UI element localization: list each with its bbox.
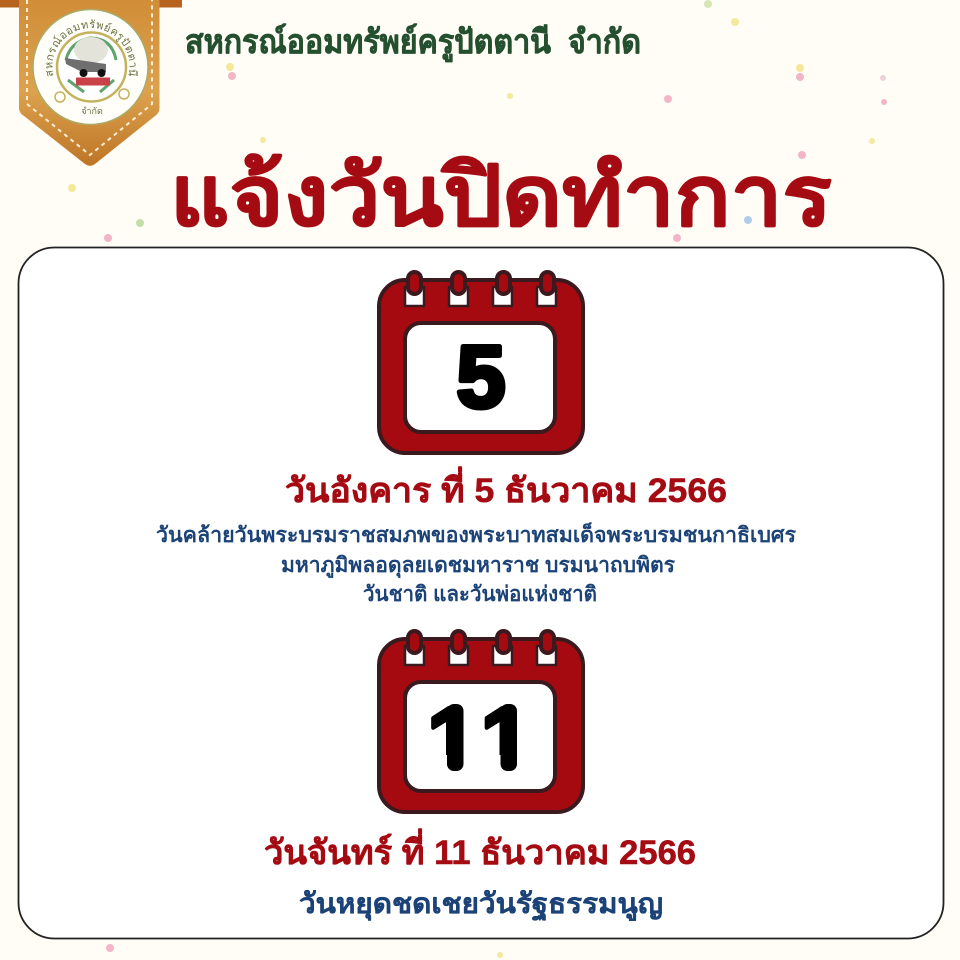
- logo seal: จำกัด: [81, 106, 103, 116]
- date heading: 5 December: วันอังคาร ที่ 5 ธันวาคม 2566: [285, 466, 727, 510]
- logo seal: [32, 8, 149, 126]
- description: 5 December: วันชาติ และวันพ่อแห่งชาติ: [363, 583, 597, 606]
- description: 5 December: วันคล้ายวันพระบรมราชสมภพของพระบาทสมเด็จพระบรมชนกาธิเบศร: [156, 521, 797, 547]
- calendar icon: 11: [379, 631, 583, 812]
- main title: แจ้งวันปิดทำการ: [170, 149, 832, 243]
- calendar icon: 5: [379, 272, 583, 453]
- description: 5 December: [156, 521, 797, 606]
- ribbon badge: [0, 0, 182, 166]
- description: 5 December: มหาภูมิพลอดุลยเดชมหาราช บรมนาถบพิตร: [281, 554, 676, 579]
- logo seal: สหกรณ์ออมทรัพย์ครูปัตตานี: [46, 19, 138, 76]
- date heading: 11 December: วันจันทร์ ที่ 11 ธันวาคม 2566: [264, 828, 696, 872]
- white content panel: [18, 248, 944, 938]
- calendar icon: 5: 5: [457, 327, 505, 426]
- calendar icon: 11: 11: [427, 690, 531, 790]
- description: 11 December: วันหยุดชดเชยวันรัฐธรรมนูญ: [299, 888, 663, 922]
- organisation name: สหกรณ์ออมทรัพย์ครูปัตตานี จำกัด: [185, 23, 641, 63]
